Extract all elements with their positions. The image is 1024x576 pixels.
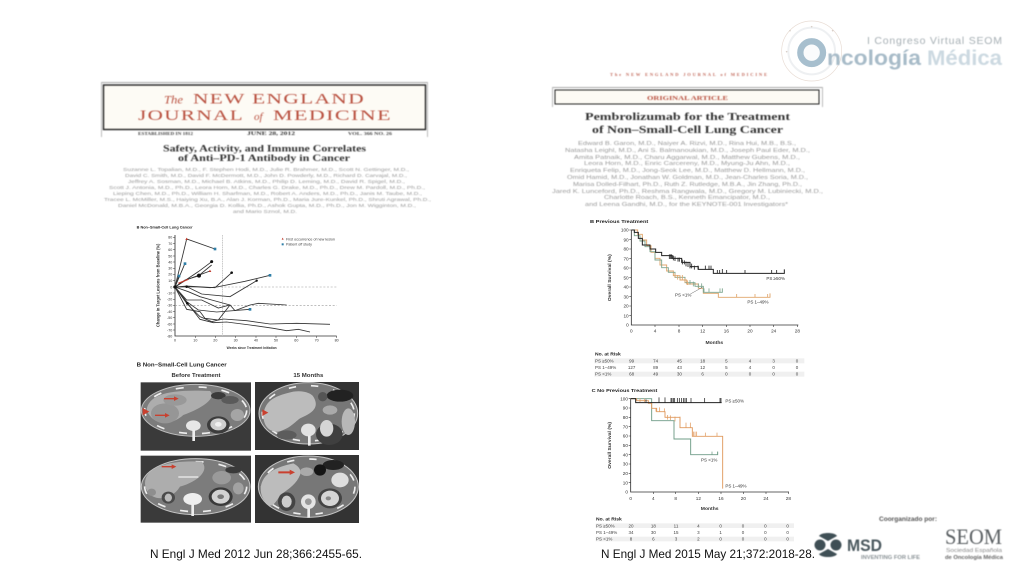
- survival curve: PS ≥50%: [631, 399, 722, 403]
- chart: overall survival, previous treatment: 20: [623, 304, 629, 309]
- chart: change in target lesions from baseline: -70: [167, 328, 172, 332]
- table: number at risk: 18: [651, 523, 656, 528]
- chart: overall survival, previous treatment: 28: [795, 329, 800, 334]
- panel: 2015 NEJM article: [552, 72, 823, 542]
- table: number at risk: [596, 517, 794, 542]
- table: number at risk: 0: [719, 523, 722, 528]
- chart: overall survival, previous treatment: 4: [654, 329, 657, 334]
- authors list: Edward B. Garon, M.D., Naiyer A. Rizvi, M.D., Rina Hui, M.B., B.S.,: [578, 141, 796, 147]
- icon: MSD mark: [814, 533, 842, 557]
- masthead: The New England Journal of Medicine: [101, 82, 428, 137]
- logo: SEOM: SEOM: [945, 524, 1002, 549]
- table: number at risk: 15: [673, 530, 679, 535]
- table: number at risk: 0: [786, 530, 789, 535]
- chart: overall survival, previous treatment: Overall Survival (%): [607, 254, 613, 301]
- chart: overall survival, no previous treatment: 50: [623, 443, 628, 448]
- chart: overall survival, previous treatment: 100: [621, 228, 629, 233]
- masthead: The New England Journal of Medicine: ESTABLISHED IN 1812: [138, 132, 193, 136]
- citation: 2012 article: N Engl J Med 2012 Jun 28;366:2455-65.: [150, 547, 362, 561]
- table: number at risk: [594, 351, 804, 377]
- survival curve: PS ≥50%: [631, 230, 784, 273]
- table: number at risk: 0: [786, 537, 789, 542]
- table: number at risk: PS <1%: [595, 372, 611, 377]
- table: number at risk: 0: [742, 530, 745, 535]
- chart: change in target lesions from baseline: -40: [167, 310, 172, 314]
- chart legend: [282, 237, 335, 247]
- CT scan: before, lower: [141, 456, 251, 523]
- table: number at risk: 74: [653, 358, 659, 363]
- chart: overall survival, previous treatment: 20: [747, 329, 753, 334]
- chart legend: Patient off study: [286, 243, 312, 247]
- table: number at risk: 34: [628, 530, 634, 535]
- chart: overall survival, no previous treatment: 100: [620, 396, 628, 401]
- chart: change in target lesions from baseline: 0: [170, 285, 172, 289]
- table: number at risk: 4: [697, 523, 700, 528]
- chart: overall survival, no previous treatment: PS <1%: [701, 457, 717, 462]
- chart: change in target lesions from baseline: 20: [213, 339, 217, 343]
- article title: of Anti–PD-1 Antibody in Cancer: [178, 154, 351, 164]
- table: number at risk: 8: [630, 537, 633, 542]
- chart: overall survival, no previous treatment: 28: [786, 496, 791, 501]
- chart: change in target lesions from baseline: 50: [274, 339, 278, 343]
- table: number at risk: 99: [629, 358, 635, 363]
- table: number at risk: 0: [764, 530, 767, 535]
- authors list: Tracee L. McMiller, M.S., Haiying Xu, B.A., Alan J. Korman, Ph.D., Maria Jure-Kunkel, Ph.D., Shruti Agrawal, Ph.D.,: [104, 197, 431, 203]
- figure: CT scans before and after treatment: Before Treatment: [171, 373, 221, 379]
- chart: overall survival, previous treatment: 60: [623, 266, 629, 271]
- survival curve: PS <1%: [631, 399, 718, 455]
- authors list: Leora Horn, M.D., Enric Carcereny, M.D., Myung-Ju Ahn, M.D.,: [584, 161, 790, 167]
- chart: change in target lesions from baseline: -20: [167, 298, 172, 302]
- CT scan: 15 months, upper: [255, 382, 359, 450]
- chart: overall survival, no previous treatment: Overall Survival (%): [607, 422, 613, 469]
- figure: CT scans before and after treatment: [137, 363, 359, 523]
- chart: overall survival, previous treatment: 90: [623, 237, 629, 242]
- chart: overall survival, previous treatment: 40: [623, 285, 629, 290]
- table: number at risk: 0: [719, 537, 722, 542]
- chart: overall survival, no previous treatment: 8: [674, 496, 677, 501]
- table: number at risk: 3: [697, 530, 700, 535]
- authors list: Lieping Chen, M.D., Ph.D., William H. Sharfman, M.D., Robert A. Anders, M.D., Ph.D., Janis M. Taube, M.D.,: [113, 191, 422, 197]
- chart: overall survival, previous treatment: 0: [630, 329, 633, 334]
- chart: overall survival, previous treatment: 50: [623, 275, 629, 280]
- authors list: Jeffrey A. Sosman, M.D., Michael B. Atkins, M.D., Philip D. Leming, M.D., David R. Spigel, M.D.,: [128, 179, 405, 185]
- table: number at risk: 5: [725, 365, 728, 370]
- table: number at risk: 1: [719, 530, 722, 535]
- chart: change in target lesions from baseline: 70: [315, 339, 319, 343]
- authors list: Jared K. Lunceford, Ph.D., Reshma Rangwala, M.D., Gregory M. Lubiniecki, M.D.,: [552, 189, 823, 195]
- table: number at risk: 3: [772, 358, 775, 363]
- survival curve: PS <1%: [631, 230, 722, 292]
- chart: overall survival, previous treatment: [590, 219, 804, 377]
- authors list: Enriqueta Felip, M.D., Jong-Seok Lee, M.D., Matthew D. Hellmann, M.D.,: [570, 168, 805, 174]
- MSD tagline: INVENTING FOR LIFE: [861, 555, 920, 561]
- table: number at risk: 43: [677, 365, 682, 370]
- chart: overall survival, no previous treatment: 10: [623, 480, 628, 485]
- original article banner: ORIGINAL ARTICLE: [647, 96, 728, 102]
- logo text: Médica: [927, 47, 1002, 70]
- masthead: The New England Journal of Medicine: VOL. 366 NO. 26: [348, 132, 392, 136]
- table: number at risk: 45: [677, 358, 682, 363]
- chart: change in target lesions from baseline: Change in Target Lesions from Baseline (%): [155, 243, 160, 327]
- logo: SEOM: Sociedad Española: [946, 548, 1003, 554]
- chart: overall survival, no previous treatment: C No Previous Treatment: [592, 388, 658, 393]
- masthead: The New England Journal of Medicine: MEDICINE: [273, 108, 392, 124]
- chart: change in target lesions from baseline: 10: [193, 339, 197, 343]
- table: number at risk: 89: [653, 365, 659, 370]
- authors list: and Leena Gandhi, M.D., for the KEYNOTE-001 Investigators*: [585, 202, 788, 208]
- table: number at risk: 30: [677, 372, 682, 377]
- table: number at risk: 4: [749, 365, 752, 370]
- authors list: [104, 167, 431, 215]
- chart: change in target lesions from baseline: 60: [168, 248, 172, 252]
- logo: MSD: [814, 533, 920, 561]
- chart: overall survival, previous treatment: 16: [724, 329, 729, 334]
- MSD wordmark: MSD: [847, 536, 882, 555]
- article title: of Non–Small-Cell Lung Cancer: [592, 125, 783, 136]
- table: number at risk: 4: [749, 358, 752, 363]
- chart: overall survival, previous treatment: B Previous Treatment: [590, 219, 649, 224]
- chart: overall survival, previous treatment: 0: [626, 323, 629, 328]
- masthead: The New England Journal of Medicine: The: [164, 92, 184, 106]
- table: number at risk: 5: [725, 358, 728, 363]
- chart: overall survival, no previous treatment: 60: [623, 434, 628, 439]
- chart: change in target lesions from baseline: 80: [168, 236, 172, 240]
- masthead: The New England Journal of Medicine: JUNE 28, 2012: [247, 132, 296, 137]
- chart: overall survival, previous treatment: Months: [705, 340, 723, 346]
- chart: change in target lesions from baseline: 30: [168, 267, 172, 271]
- chart: overall survival, no previous treatment: 0: [629, 496, 632, 501]
- table: number at risk: 127: [628, 365, 636, 370]
- survival curve: PS 1–49%: [631, 230, 770, 297]
- authors list: and Mario Sznol, M.D.: [233, 209, 297, 215]
- chart: change in target lesions from baseline: 70: [168, 242, 172, 246]
- chart: change in target lesions from baseline: 30: [234, 339, 238, 343]
- table: number at risk: 0: [742, 537, 745, 542]
- chart: overall survival, previous treatment: 8: [678, 329, 681, 334]
- chart: change in target lesions from baseline: -10: [167, 291, 172, 295]
- chart: overall survival, no previous treatment: 24: [763, 496, 769, 501]
- table: number at risk: 12: [700, 365, 706, 370]
- authors list: Daniel McDonald, M.B.A., Georgia D. Kollia, Ph.D., Ashok Gupta, M.D., Ph.D., Jon M. Wigginton, M.D.,: [118, 203, 416, 209]
- chart: overall survival, previous treatment: 70: [623, 256, 629, 261]
- label: coorganized by: Coorganizado por:: [879, 516, 937, 523]
- chart: overall survival, no previous treatment: 80: [623, 415, 628, 420]
- chart: overall survival, previous treatment: 24: [771, 329, 777, 334]
- article title: Safety, Activity, and Immune Correlates: [163, 144, 366, 154]
- masthead: The New England Journal of Medicine: JOURNAL: [138, 108, 244, 124]
- chart: overall survival, no previous treatment: 40: [623, 452, 628, 457]
- table: number at risk: 0: [742, 523, 745, 528]
- table: number at risk: 6: [652, 537, 655, 542]
- chart: overall survival, no previous treatment: [592, 388, 794, 542]
- logo: SEOM: [945, 524, 1003, 561]
- chart: change in target lesions from baseline: -80: [167, 334, 172, 338]
- figure: CT scans before and after treatment: B Non–Small-Cell Lung Cancer: [137, 363, 227, 369]
- chart: overall survival, no previous treatment: 16: [718, 496, 724, 501]
- chart: change in target lesions from baseline: 40: [254, 339, 258, 343]
- article title: [163, 144, 366, 164]
- authors list: [552, 141, 823, 208]
- chart: change in target lesions from baseline: -60: [167, 322, 172, 326]
- logo text: I Congreso Virtual SEOM: [867, 35, 1002, 47]
- chart: change in target lesions from baseline: -30: [167, 304, 172, 308]
- table: number at risk: 20: [628, 523, 634, 528]
- icon: concentric rings: [782, 21, 842, 81]
- table: number at risk: 0: [725, 372, 728, 377]
- chart: change in target lesions from baseline: Weeks since Treatment Initiation: [227, 345, 277, 350]
- chart: overall survival, no previous treatment: 4: [652, 496, 655, 501]
- chart: overall survival, no previous treatment: 20: [623, 471, 628, 476]
- chart: change in target lesions from baseline: [137, 225, 339, 350]
- chart: change in target lesions from baseline: 40: [168, 260, 172, 264]
- chart: overall survival, no previous treatment: 70: [623, 424, 628, 429]
- table: number at risk: 18: [700, 358, 706, 363]
- table: number at risk: 0: [764, 537, 767, 542]
- table: number at risk: 0: [796, 372, 799, 377]
- chart: overall survival, previous treatment: 10: [623, 313, 629, 318]
- chart: overall survival, no previous treatment: PS ≥50%: [725, 399, 744, 404]
- table: number at risk: 0: [764, 523, 767, 528]
- authors list: Amita Patnaik, M.D., Charu Aggarwal, M.D., Matthew Gubens, M.D.,: [574, 155, 800, 161]
- chart: change in target lesions from baseline: 50: [168, 254, 172, 258]
- chart: overall survival, previous treatment: 80: [623, 247, 629, 252]
- table: number at risk: 0: [796, 358, 799, 363]
- table: number at risk: 0: [796, 365, 799, 370]
- panel: 2012 NEJM article: [101, 82, 431, 523]
- article title: [585, 112, 791, 136]
- table: number at risk: PS <1%: [596, 537, 612, 542]
- chart: change in target lesions from baseline: 0: [174, 339, 176, 343]
- original article banner: [552, 87, 823, 107]
- table: number at risk: 30: [651, 530, 656, 535]
- table: number at risk: 0: [749, 372, 752, 377]
- chart: overall survival, previous treatment: 30: [623, 294, 629, 299]
- authors list: Charlotte Roach, B.S., Kenneth Emancipator, M.D.,: [604, 195, 770, 201]
- table: number at risk: 0: [772, 372, 775, 377]
- table: number at risk: 0: [786, 523, 789, 528]
- authors list: David C. Smith, M.D., David F. McDermott, M.D., John D. Powderly, M.D., Richard D. Carvajal, M.D.,: [125, 173, 407, 179]
- CT scan: 15 months, lower: [255, 455, 359, 523]
- logo text: ncología: [827, 47, 921, 70]
- chart: overall survival, previous treatment: PS <1%: [675, 293, 691, 298]
- CT scan: before, upper: [141, 382, 251, 451]
- chart: change in target lesions from baseline: 10: [168, 279, 172, 283]
- citation: 2015 article: N Engl J Med 2015 May 21;372:2018-28.: [601, 547, 815, 561]
- chart: change in target lesions from baseline: 80: [335, 339, 339, 343]
- chart: change in target lesions from baseline: 20: [168, 273, 172, 277]
- table: number at risk: 49: [653, 372, 659, 377]
- logo text: [827, 35, 1002, 70]
- logo: I Congreso Virtual SEOM Oncología Médica: [782, 21, 1002, 81]
- chart: overall survival, previous treatment: PS 1–49%: [747, 300, 769, 305]
- article title: Pembrolizumab for the Treatment: [585, 112, 791, 123]
- chart: change in target lesions from baseline: 60: [294, 339, 298, 343]
- chart: change in target lesions from baseline: -50: [167, 316, 172, 320]
- chart: overall survival, previous treatment: 12: [700, 329, 706, 334]
- chart: overall survival, no previous treatment: 20: [741, 496, 746, 501]
- table: number at risk: PS ≥50%: [595, 358, 614, 363]
- chart: overall survival, no previous treatment: 90: [623, 406, 628, 411]
- table: number at risk: 11: [674, 523, 679, 528]
- table: number at risk: 2: [697, 537, 700, 542]
- table: number at risk: No. at Risk: [595, 351, 621, 357]
- small journal header: The NEW ENGLAND JOURNAL of MEDICINE: [610, 72, 767, 77]
- chart: overall survival, no previous treatment: 30: [623, 462, 628, 467]
- survival curve: PS 1–49%: [631, 399, 723, 489]
- table: number at risk: 3: [675, 537, 678, 542]
- logo: SEOM: de Oncología Médica: [945, 555, 1003, 561]
- authors list: Suzanne L. Topalian, M.D., F. Stephen Hodi, M.D., Julie R. Brahmer, M.D., Scott N. Gettinger, M.D.,: [123, 167, 409, 173]
- chart: overall survival, no previous treatment: 0: [625, 490, 628, 495]
- table: number at risk: 0: [772, 365, 775, 370]
- table: number at risk: PS 1–49%: [595, 365, 616, 370]
- authors list: Natasha Leighl, M.D., Ani S. Balmanoukian, M.D., Joseph Paul Eder, M.D.,: [565, 148, 810, 154]
- table: number at risk: No. at Risk: [596, 517, 622, 523]
- masthead: The New England Journal of Medicine: NEW ENGLAND: [193, 92, 365, 108]
- authors list: Scott J. Antonia, M.D., Ph.D., Leora Horn, M.D., Charles G. Drake, M.D., Ph.D., Drew M. Pardoll, M.D., Ph.D.,: [109, 185, 425, 191]
- chart: overall survival, no previous treatment: Months: [701, 506, 719, 512]
- masthead: The New England Journal of Medicine: of: [254, 111, 264, 123]
- chart legend: First occurrence of new lesion: [286, 237, 335, 241]
- chart: overall survival, no previous treatment: PS 1–49%: [725, 484, 747, 489]
- table: number at risk: 6: [701, 372, 704, 377]
- authors list: Omid Hamid, M.D., Jonathan W. Goldman, M.D., Jean-Charles Soria, M.D.,: [567, 175, 808, 181]
- figure: CT scans before and after treatment: 15 Months: [293, 373, 323, 379]
- chart: overall survival, no previous treatment: 12: [696, 496, 701, 501]
- chart: overall survival, previous treatment: PS ≥50%: [766, 276, 785, 281]
- table: number at risk: PS 1–49%: [596, 530, 617, 535]
- table: number at risk: 68: [629, 372, 635, 377]
- authors list: Marisa Dolled-Filhart, Ph.D., Ruth Z. Rutledge, M.B.A., Jin Zhang, Ph.D.,: [573, 182, 802, 188]
- chart: change in target lesions from baseline: B Non–Small-Cell Lung Cancer: [137, 225, 193, 230]
- table: number at risk: PS ≥50%: [596, 523, 615, 528]
